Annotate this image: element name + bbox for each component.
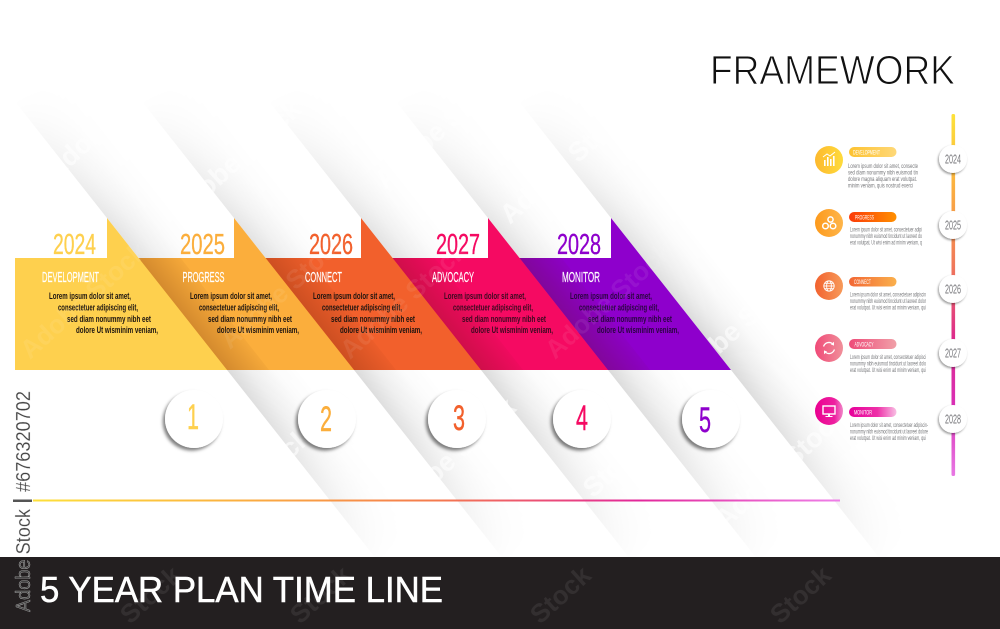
- legend item: connect: Lorem ipsum dolor sit amet, consectetuer adipiscin: [850, 292, 926, 298]
- text block: advocacy: Lorem ipsum dolor sit amet,: [444, 291, 526, 302]
- timeline node 2026: [939, 275, 967, 303]
- numbered circle 5: [682, 390, 740, 448]
- legend item: monitor: MONITOR: [854, 409, 872, 416]
- timeline node 2024: [939, 145, 967, 173]
- text block: connect: [313, 291, 422, 336]
- legend item: monitor: Lorem ipsum dolor sit amet, consectetuer adipiscin-: [850, 423, 928, 429]
- text block: connect: consectetuer adipiscing elit,: [322, 302, 402, 314]
- panel: monitor arrow: [520, 218, 731, 370]
- watermarks over ribbons: Adobe Stock: [369, 61, 512, 194]
- text block: progress: consectetuer adipiscing elit,: [199, 302, 279, 314]
- text block: monitor: [570, 291, 679, 336]
- text block: monitor: dolore Ut wisminim veniam,: [597, 325, 679, 336]
- text block: monitor: consectetuer adipiscing elit,: [579, 302, 659, 314]
- text block: advocacy: sed diam nonummy nibh eet: [462, 314, 547, 325]
- legend item: advocacy: nonummy nibh euismod tincidunt ut laoreet dolo: [850, 362, 926, 368]
- legend item: development: sed diam nonummy nibh euismod tin: [848, 170, 918, 176]
- watermarks over ribbons: Adobe Stock: [164, 93, 307, 226]
- diagonal shadow ribbons: [48, 142, 854, 524]
- text block: progress: Lorem ipsum dolor sit amet,: [190, 291, 272, 302]
- legend item: progress: [849, 212, 922, 246]
- timeline rule: [33, 500, 840, 502]
- numbered circle 2: 2: [320, 400, 332, 439]
- timeline node 2028: 2028: [945, 412, 961, 426]
- legend item: progress: Lorem ipsum dolor sit amet, consectetuer adipi: [850, 228, 922, 234]
- text block: progress: [190, 291, 299, 336]
- watermarks over ribbons: Adobe Stock: [709, 401, 852, 534]
- faint stock watermarks: Stock: [284, 559, 357, 629]
- legend item: development: Lorem ipsum dolor sit amet, consecte: [848, 164, 918, 170]
- legend item: development: DEVELOPMENT: [853, 149, 880, 156]
- legend item: monitor: nonummy nibh euismod tincidunt ut laoreet dolore: [850, 430, 928, 436]
- text block: connect: sed diam nonummy nibh eet: [331, 314, 416, 325]
- watermarks over ribbons: Adobe Stock: [39, 52, 182, 185]
- icon: monitor: [815, 397, 843, 425]
- text block: advocacy: dolore Ut wisminim veniam,: [471, 325, 553, 336]
- stock watermark id: [13, 391, 35, 612]
- heading: monitor: MONITOR: [562, 269, 600, 286]
- legend item: progress: PROGRESS: [855, 214, 874, 221]
- text block: connect: dolore Ut wisminim veniam,: [340, 325, 422, 336]
- watermarks over ribbons: Adobe Stock: [494, 96, 637, 229]
- text block: advocacy: [444, 291, 553, 336]
- text block: progress: dolore Ut wisminim veniam,: [217, 325, 299, 336]
- legend item: advocacy: erat volutpat. Ut wisi enim ad minim veniam, qui: [850, 368, 926, 374]
- footer title: 5 YEAR PLAN TIME LINE: [40, 569, 443, 610]
- faint stock watermarks: Stock: [114, 559, 187, 629]
- faint stock watermarks: Adobe Stock: [539, 235, 678, 364]
- numbered circle 5: 5: [699, 401, 711, 440]
- timeline node 2027: 2027: [945, 346, 961, 360]
- text block: progress: sed diam nonummy nibh eet: [208, 314, 293, 325]
- legend item: progress: nonummy nibh euismod tincidunt ut laoreet do: [850, 234, 922, 240]
- numbered circle 3: 3: [453, 399, 465, 438]
- faint stock watermarks: Adobe Stock: [14, 235, 153, 364]
- year: 2028: 2028: [557, 229, 601, 261]
- legend item: connect: nonummy nibh euismod tincidunt ut laoreet dolor: [850, 299, 926, 305]
- faint stock watermarks: Adobe Stock: [214, 225, 353, 354]
- numbered circle 4: [553, 390, 611, 448]
- legend item: connect: [849, 277, 926, 312]
- timeline node 2028: [939, 405, 967, 433]
- text block: monitor: sed diam nonummy nibh eet: [588, 314, 673, 325]
- text block: connect: Lorem ipsum dolor sit amet,: [313, 291, 395, 302]
- text block: advocacy: consectetuer adipiscing elit,: [453, 302, 533, 314]
- panel: advocacy arrow: [392, 218, 608, 370]
- icon: gears: [815, 209, 843, 237]
- timeline node 2027: [939, 339, 967, 367]
- watermarks over ribbons: Adobe Stock: [379, 391, 522, 524]
- icon: bar chart: [815, 146, 843, 174]
- faint stock watermarks: Stock: [524, 559, 597, 629]
- faint stock watermarks: [14, 225, 837, 629]
- panel: progress arrow: [138, 218, 354, 370]
- legend item: connect: CONNECT: [854, 279, 871, 286]
- timeline node 2025: 2025: [945, 218, 961, 232]
- heading: development: DEVELOPMENT: [42, 269, 99, 286]
- text: PROGRESS: [182, 269, 224, 286]
- timeline node 2025: [939, 211, 967, 239]
- legend item: advocacy: Lorem ipsum dolor sit amet, consectetuer adipisci: [850, 355, 926, 361]
- watermarks over ribbons: Adobe Stock: [664, 261, 807, 394]
- faint stock watermarks: Adobe Stock: [334, 235, 473, 364]
- watermarks over ribbons: Adobe Stock: [509, 431, 652, 564]
- year: 2027: 2027: [436, 229, 480, 261]
- legend item: progress: erat volutpat. Ut wisi enim ad minim veniam, q: [850, 240, 922, 246]
- timeline node 2024: 2024: [945, 152, 961, 166]
- legend item: development: [848, 147, 918, 190]
- legend item: monitor: erat volutpat. Ut wisi enim ad minim veniam, qui: [850, 436, 926, 442]
- text block: development: Lorem ipsum dolor sit amet,: [49, 291, 131, 302]
- panel: connect arrow: [266, 218, 481, 370]
- year: 2024: 2024: [53, 229, 96, 261]
- legend item: development: minim veniam, quis nostrud exerci: [848, 184, 913, 190]
- text block: development: sed diam nonummy nibh eet: [67, 314, 152, 325]
- footer band: [0, 557, 1000, 629]
- title: framework: FRAMEWORK: [710, 47, 955, 93]
- legend item: connect: erat volutpat. Ut wisi enim ad minim veniam, qui: [850, 306, 926, 312]
- legend item: monitor: [849, 407, 928, 442]
- numbered circle 1: [165, 390, 223, 448]
- text block: development: consectetuer adipiscing elit,: [58, 302, 138, 314]
- legend item: development: dolore magna aliquam erat volutpat.: [848, 177, 917, 183]
- timeline node 2026: 2026: [945, 282, 961, 296]
- legend item: advocacy: [849, 339, 926, 374]
- text block: development: [49, 291, 158, 336]
- text: CONNECT: [305, 269, 342, 286]
- watermarks over ribbons: [39, 52, 852, 564]
- numbered circle 4: 4: [576, 399, 588, 438]
- year: 2026: 2026: [309, 229, 353, 261]
- legend item: advocacy: ADVOCACY: [854, 341, 874, 348]
- numbered circle 3: [428, 390, 486, 448]
- stock watermark id: Adobe Stock: [13, 508, 35, 612]
- faint stock watermarks: Stock: [764, 559, 837, 629]
- stock watermark id: #676320702: [13, 391, 35, 492]
- numbered circle 1: 1: [187, 398, 199, 437]
- icon: globe: [815, 272, 843, 300]
- panel: development arrow: [15, 218, 227, 370]
- year: 2025: 2025: [180, 229, 225, 261]
- text block: development: dolore Ut wisminim veniam,: [76, 325, 158, 336]
- text: ADVOCACY: [432, 269, 474, 286]
- right timeline line: [952, 114, 955, 476]
- numbered circle 2: [298, 390, 356, 448]
- text block: monitor: Lorem ipsum dolor sit amet,: [570, 291, 652, 302]
- icon: refresh: [815, 334, 843, 362]
- watermarks over ribbons: Adobe Stock: [174, 421, 317, 554]
